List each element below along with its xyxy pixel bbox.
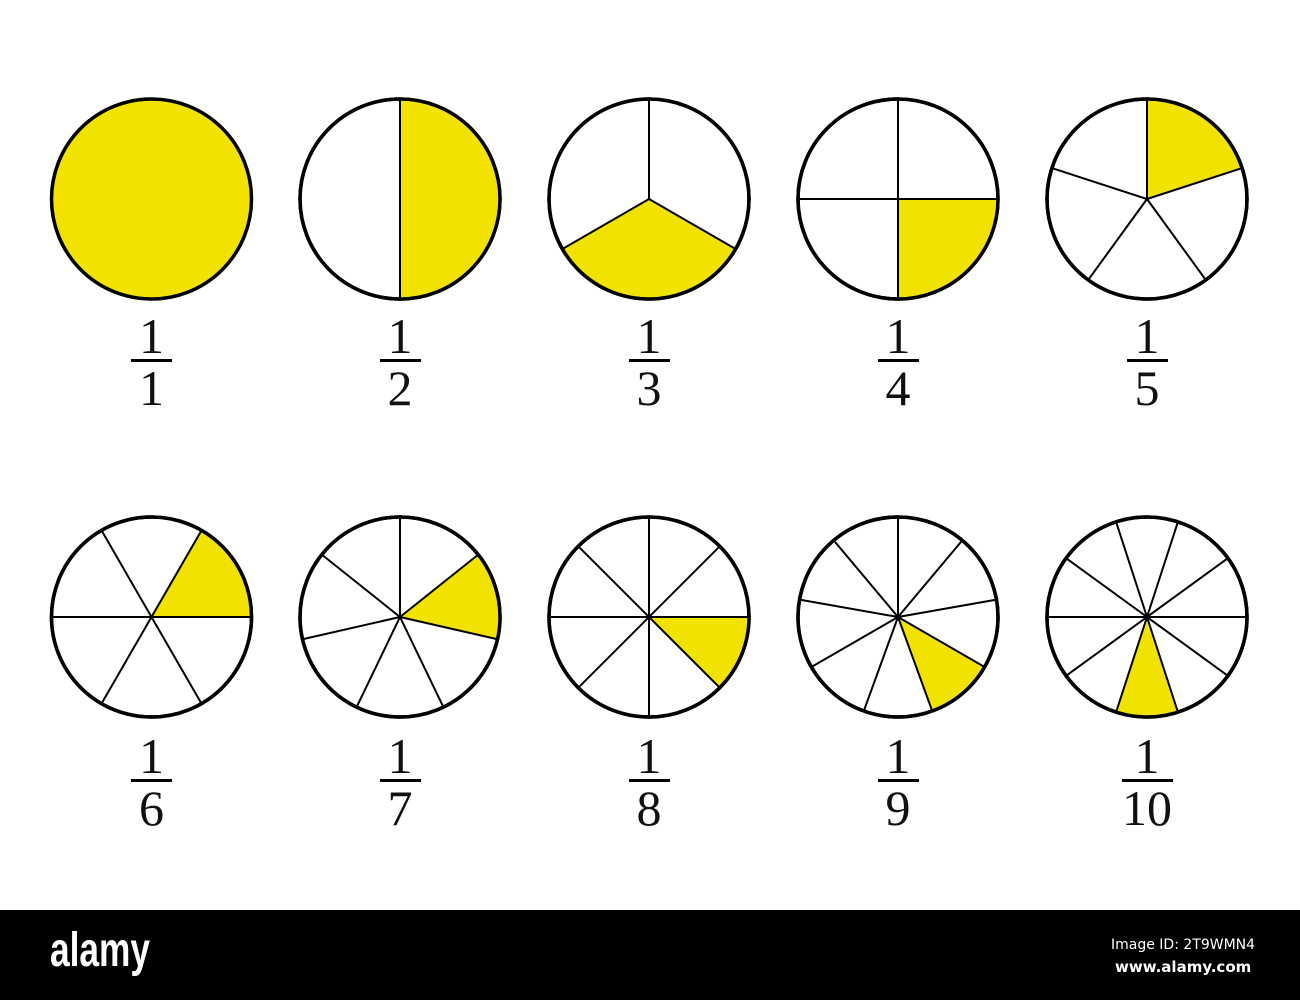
fraction labels row 2: 6 — [139, 780, 164, 836]
pie: 1/9 — [798, 517, 998, 717]
pie: 1/5 — [1047, 99, 1247, 299]
pie: 1/6 — [52, 517, 252, 717]
pie: 1/3 — [549, 99, 749, 299]
fraction labels row 1: 3 — [636, 360, 662, 416]
pie: 1/7 — [300, 517, 500, 717]
fraction labels row 2: 1 — [636, 728, 662, 784]
fraction labels row 2: 9 — [886, 780, 910, 836]
fraction labels row 1: 1 — [886, 308, 910, 364]
fraction labels row 2 — [131, 728, 1173, 836]
fraction labels row 1: 1 — [139, 308, 164, 364]
fraction labels row 2: 1 — [886, 728, 910, 784]
pie: 1/10 — [1047, 517, 1247, 717]
fraction labels row 1: 1 — [388, 308, 412, 364]
fraction labels row 1 — [131, 308, 1168, 416]
fraction labels row 2: 1 — [1134, 728, 1160, 784]
fraction labels row 1: 1 — [636, 308, 662, 364]
fraction labels row 1: 5 — [1134, 360, 1160, 416]
fraction labels row 2: 1 — [139, 728, 164, 784]
fraction labels row 2: 8 — [636, 780, 662, 836]
footer bar — [0, 910, 1300, 1000]
image id: Image ID: 2T9WMN4 — [1111, 937, 1255, 953]
fraction labels row 2: 10 — [1122, 780, 1172, 836]
fraction labels row 2: 7 — [388, 780, 412, 836]
fraction labels row 1: 2 — [388, 360, 412, 416]
pie: 1/2 — [300, 99, 500, 299]
fraction labels row 1: 4 — [886, 360, 910, 416]
pie: 1/8 — [549, 517, 749, 717]
fraction labels row 2: 1 — [388, 728, 412, 784]
url: www.alamy.com — [1115, 958, 1251, 976]
fraction labels row 1: 1 — [139, 360, 164, 416]
pie: 1/1 — [52, 99, 252, 299]
pie: 1/4 — [798, 99, 998, 299]
logo: alamy: alamy — [50, 924, 150, 977]
fraction labels row 1: 1 — [1134, 308, 1160, 364]
